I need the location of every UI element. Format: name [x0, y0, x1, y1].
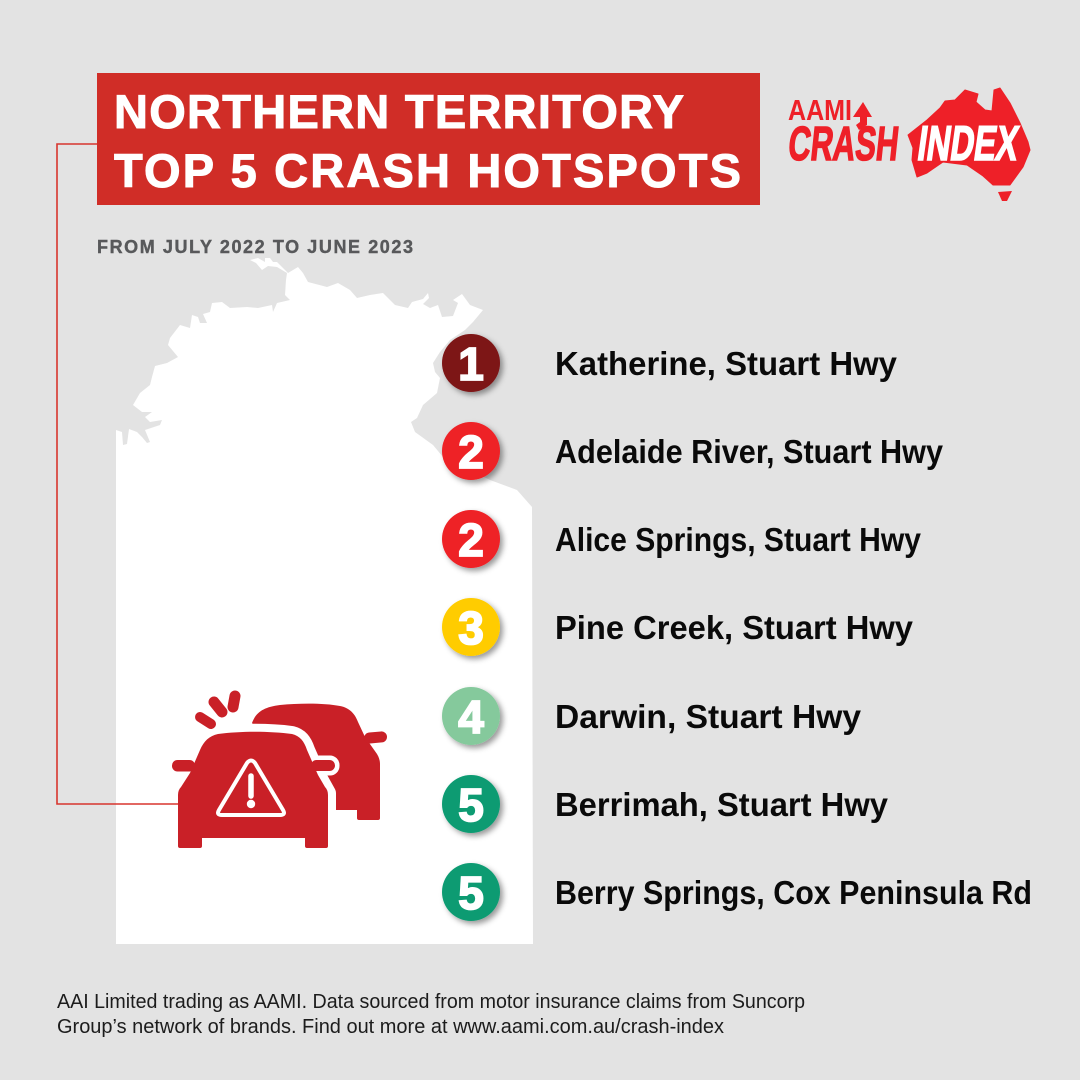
logo: AAMI Crash Index — [786, 88, 1030, 201]
hotspot 3: Pine Creek — [442, 598, 914, 656]
hotspot 1: Katherine — [442, 334, 898, 392]
logo wordmark CRASH: CRASH — [786, 117, 902, 171]
hotspot 2: Adelaide River: 2 — [458, 426, 484, 478]
subtitle: date range: FROM JULY 2022 TO JUNE 2023 — [97, 237, 413, 257]
title line 2: TOP 5 CRASH HOTSPOTS — [114, 144, 741, 197]
hotspot 1: Katherine: Katherine, Stuart Hwy — [555, 345, 898, 382]
connector line: title to car icon — [57, 144, 178, 804]
hotspot 3: Pine Creek: 3 — [458, 602, 484, 654]
hotspot 5: Berrimah: Berrimah, Stuart Hwy — [555, 786, 889, 823]
logo Australia map — [908, 88, 1030, 185]
front car white halo — [178, 732, 335, 848]
rear car — [252, 704, 387, 820]
impact sparks — [200, 696, 235, 724]
title line 1: NORTHERN TERRITORY — [114, 85, 684, 138]
warning triangle — [218, 760, 284, 815]
hotspot 4: Darwin: Darwin, Stuart Hwy — [555, 698, 862, 735]
hotspot 5: Berry Springs: Berry Springs, Cox Peninsula Rd — [555, 874, 1032, 911]
hotspot 5: Berrimah — [442, 775, 889, 833]
icon: two crashed cars with warning — [172, 696, 387, 848]
footer source note — [57, 991, 805, 1038]
footer source note: AAI Limited trading as AAMI. Data sourced from motor insurance claims from Suncorp — [57, 991, 805, 1013]
hotspot 5: Berry Springs — [442, 863, 1032, 921]
logo arrow — [853, 102, 872, 130]
logo wordmark AAMI: AAMI — [788, 95, 852, 127]
logo Tasmania — [998, 191, 1012, 201]
front car body — [172, 732, 335, 848]
hotspot 1: Katherine: 1 — [458, 338, 484, 390]
hotspot 2: Adelaide River: Adelaide River, Stuart Hwy — [555, 433, 944, 470]
hotspot 2: Adelaide River — [442, 422, 944, 480]
hotspot 2: Alice Springs — [442, 510, 922, 568]
map: Northern Territory silhouette — [116, 258, 533, 944]
hotspot 2: Alice Springs: 2 — [458, 514, 484, 566]
left mirror — [172, 760, 195, 772]
hotspot 2: Alice Springs: Alice Springs, Stuart Hwy — [555, 521, 922, 558]
hotspot 4: Darwin: 4 — [458, 691, 484, 743]
hotspot 5: Berry Springs: 5 — [458, 867, 484, 919]
hotspot 5: Berrimah: 5 — [458, 779, 484, 831]
hotspot 3: Pine Creek: Pine Creek, Stuart Hwy — [555, 609, 914, 646]
footer source note: Group’s network of brands. Find out more at www.aami.com.au/crash-index — [57, 1016, 724, 1038]
title banner — [97, 73, 760, 205]
right mirror — [311, 760, 335, 771]
logo wordmark INDEX: INDEX — [914, 116, 1022, 171]
hotspot 4: Darwin — [442, 687, 862, 745]
